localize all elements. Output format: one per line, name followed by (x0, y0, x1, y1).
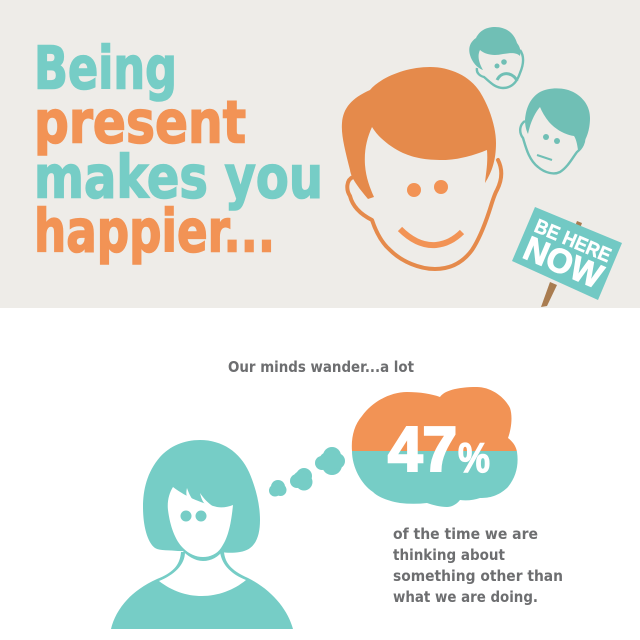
body text: thinking about (393, 546, 505, 564)
title (34, 34, 323, 266)
body text (393, 525, 563, 606)
cloud: 47 percent: % (458, 434, 490, 481)
icon: woman (111, 440, 293, 629)
icon: big smiling face (342, 67, 501, 269)
icon: be here now sign (512, 207, 622, 307)
header panel background (0, 0, 640, 308)
icon: be here now sign: NOW (518, 229, 609, 297)
bubble small (269, 480, 286, 496)
icon: sad face (469, 27, 523, 88)
cloud: 47 percent (352, 387, 518, 507)
title: happier... (34, 196, 275, 266)
body text: of the time we are (393, 525, 538, 543)
body text: what we are doing. (393, 588, 538, 606)
body text: something other than (393, 567, 563, 585)
title: makes you (34, 142, 323, 212)
title: present (34, 88, 246, 156)
bubble medium (290, 468, 312, 490)
icon: small thought bubbles (269, 447, 345, 496)
icon: neutral face (520, 88, 590, 173)
bubble large (315, 447, 345, 475)
title: Being (34, 34, 177, 102)
subheading: Our minds wander...a lot (228, 358, 414, 376)
icon: be here now sign: BE HERE (531, 215, 614, 267)
cloud: 47 percent: 47 (388, 415, 457, 485)
